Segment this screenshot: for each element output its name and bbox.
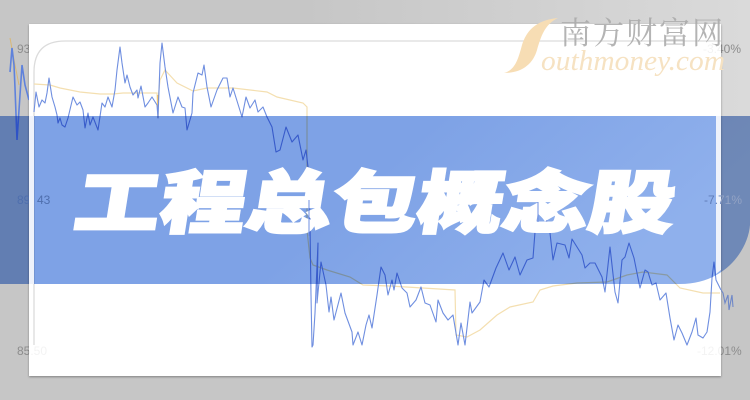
band margin right xyxy=(716,116,721,274)
average line strong segment xyxy=(157,95,159,118)
band margin left xyxy=(29,116,34,284)
outer chart fragment left xyxy=(10,38,29,140)
axis labels behind panel xyxy=(17,42,742,358)
price line xyxy=(34,43,721,347)
right axis label on band: -7.71% xyxy=(704,193,742,207)
watermark swoosh xyxy=(504,18,558,73)
outer average line xyxy=(10,38,19,85)
axis labels behind panel: -12.01% xyxy=(697,344,742,358)
faint axis labels on panel: 85.50 xyxy=(17,344,47,358)
background highlight top right xyxy=(0,0,750,116)
outer price line xyxy=(10,48,29,140)
stock chart xyxy=(34,43,721,347)
axis labels behind panel: 93.36 xyxy=(17,42,47,56)
axis labels behind panel: 85.50 xyxy=(17,344,47,358)
outer chart fragment right xyxy=(721,289,734,310)
axis labels behind panel: -3.40% xyxy=(703,42,741,56)
watermark domain: outhmoney.com xyxy=(541,46,725,77)
right axis label on band xyxy=(704,196,742,204)
average line xyxy=(34,70,720,337)
watermark chinese name: 南方财富网 xyxy=(560,16,723,51)
left axis label on band xyxy=(18,196,50,204)
right axis label on band: -7.71% xyxy=(704,193,742,207)
watermark xyxy=(504,16,725,77)
faint axis labels on panel xyxy=(17,42,742,358)
faint axis labels on panel: -3.40% xyxy=(703,42,741,56)
left axis label on band: 43 xyxy=(37,193,51,207)
blue band xyxy=(0,116,750,284)
chart frame xyxy=(34,41,721,345)
faint axis labels on panel: -12.01% xyxy=(697,344,742,358)
chart line over title xyxy=(309,200,538,236)
left axis label on band: 89.43 xyxy=(17,193,47,207)
title: 工程总包概念股 xyxy=(69,149,684,247)
